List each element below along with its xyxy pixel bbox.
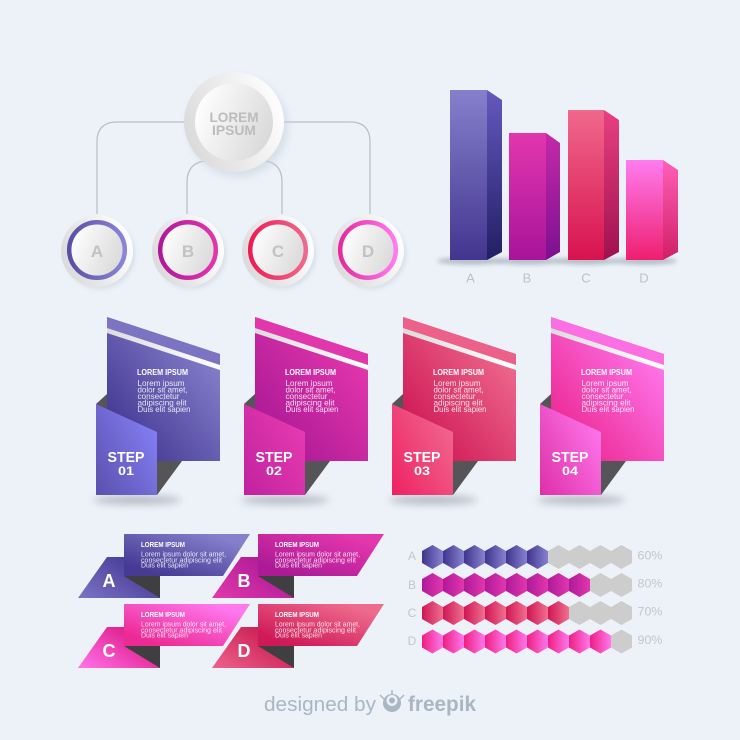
step 02 text: adipiscing elit <box>286 398 335 408</box>
banner B text: Lorem ipsum dolor sit amet, <box>275 550 360 559</box>
panel: step 01 <box>93 317 220 504</box>
row A 60%: A <box>408 549 416 563</box>
row C 70%: 70% <box>638 604 663 618</box>
row B 80%: B <box>408 578 416 592</box>
footer credit: designed by <box>264 694 376 716</box>
banner A text: LOREM IPSUM <box>141 542 185 549</box>
step 01 text: dolor sit amet, <box>138 384 188 394</box>
row B 80% <box>408 573 663 597</box>
bar B <box>496 133 560 286</box>
step 04 text: STEP <box>552 449 588 466</box>
row C 70%: C <box>408 606 417 620</box>
banner C text: LOREM IPSUM <box>141 612 185 619</box>
row D 90%: D <box>408 634 417 648</box>
bar D <box>613 160 678 286</box>
row B 80%: 80% <box>638 576 663 590</box>
node A: A <box>91 242 103 261</box>
banner C text <box>141 612 226 640</box>
banner A text: Lorem ipsum dolor sit amet, <box>141 550 226 559</box>
step 03 text: STEP <box>404 449 440 466</box>
step 03 text: consectetur <box>434 391 476 401</box>
panel: organisation chart <box>61 72 406 289</box>
bar B: B <box>523 270 531 286</box>
banner D text <box>275 612 360 640</box>
step 01 text: STEP <box>108 449 144 466</box>
banner C text: Lorem ipsum dolor sit amet, <box>141 620 226 629</box>
row D 90%: 90% <box>638 633 663 647</box>
bar A: A <box>466 270 475 286</box>
panel: banner A: A <box>102 571 116 591</box>
banner B text: Duis elit sapien <box>275 561 322 570</box>
step 01 text: 01 <box>118 464 134 478</box>
panel: banner C <box>78 604 250 668</box>
step 01 text: adipiscing elit <box>138 398 187 408</box>
step 03 text: Lorem ipsum <box>434 378 480 388</box>
banner D text: consectetur adipiscing elit <box>275 625 357 634</box>
footer credit <box>264 690 476 716</box>
node C: C <box>272 242 284 261</box>
step 03 text: dolor sit amet, <box>434 384 484 394</box>
banner A text: Duis elit sapien <box>141 561 188 570</box>
step 02 text: dolor sit amet, <box>286 384 336 394</box>
connector lines <box>97 122 370 214</box>
panel: banner C: C <box>102 641 116 661</box>
step 02 text: LOREM IPSUM <box>285 368 336 377</box>
banner B text <box>275 542 360 570</box>
row A 60% <box>408 545 663 569</box>
panel: step 02 <box>241 317 368 504</box>
panel: step 03 <box>389 317 516 504</box>
row A 60%: 60% <box>638 548 663 562</box>
bar C <box>554 110 619 286</box>
row D 90% <box>408 630 663 654</box>
node B: B <box>182 242 194 261</box>
bar A <box>437 90 503 286</box>
banner C text: Duis elit sapien <box>141 631 188 640</box>
step 02 text <box>256 368 339 478</box>
step 03 text: 03 <box>414 464 430 478</box>
banner D text: Duis elit sapien <box>275 631 322 640</box>
panel: banner B: B <box>238 571 250 591</box>
panel: banner D <box>212 604 384 668</box>
node C <box>242 215 316 289</box>
step 04 text: 04 <box>562 464 578 478</box>
step 04 text: Lorem ipsum <box>582 378 628 388</box>
row C 70% <box>408 601 663 625</box>
hexagon progress chart <box>408 545 663 654</box>
panel: banner A <box>78 534 250 598</box>
step 04 text: Duis elit sapien <box>582 404 635 414</box>
node A <box>61 215 135 289</box>
step 01 text <box>108 368 191 478</box>
step 02 text: Lorem ipsum <box>286 378 332 388</box>
step 04 text: dolor sit amet, <box>582 384 632 394</box>
step 01 text: Duis elit sapien <box>138 404 191 414</box>
step 03 text <box>404 368 487 478</box>
banner A text <box>141 542 226 570</box>
step 03 text: adipiscing elit <box>434 398 483 408</box>
node D: D <box>362 242 374 261</box>
root circle: LOREM <box>210 109 258 125</box>
panel: step 04 <box>537 317 664 504</box>
panel: banner B <box>212 534 384 598</box>
root circle <box>184 72 288 177</box>
step 04 text: adipiscing elit <box>582 398 631 408</box>
step 03 text: LOREM IPSUM <box>433 368 484 377</box>
step 02 text: 02 <box>266 464 282 478</box>
bar C: C <box>581 270 591 286</box>
bar chart <box>437 90 678 286</box>
step 03 text: Duis elit sapien <box>434 404 487 414</box>
banner B text: consectetur adipiscing elit <box>275 555 357 564</box>
step 02 text: STEP <box>256 449 292 466</box>
panel: banner D: D <box>238 641 250 661</box>
step 02 text: Duis elit sapien <box>286 404 339 414</box>
banner B text: LOREM IPSUM <box>275 542 319 549</box>
banner A text: consectetur adipiscing elit <box>141 555 223 564</box>
step 01 text: Lorem ipsum <box>138 378 184 388</box>
banner D text: Lorem ipsum dolor sit amet, <box>275 620 360 629</box>
step 04 text: LOREM IPSUM <box>581 368 632 377</box>
banner D text: LOREM IPSUM <box>275 612 319 619</box>
node D <box>332 215 406 289</box>
step 02 text: consectetur <box>286 391 328 401</box>
node B <box>152 215 226 289</box>
step 04 text: consectetur <box>582 391 624 401</box>
banner C text: consectetur adipiscing elit <box>141 625 223 634</box>
step 01 text: consectetur <box>138 391 180 401</box>
bar D: D <box>639 270 649 286</box>
icon: freepik mascot <box>380 690 404 712</box>
root circle: IPSUM <box>212 122 256 138</box>
step 04 text <box>552 368 635 478</box>
step 01 text: LOREM IPSUM <box>137 368 188 377</box>
footer credit: freepik <box>408 693 476 716</box>
